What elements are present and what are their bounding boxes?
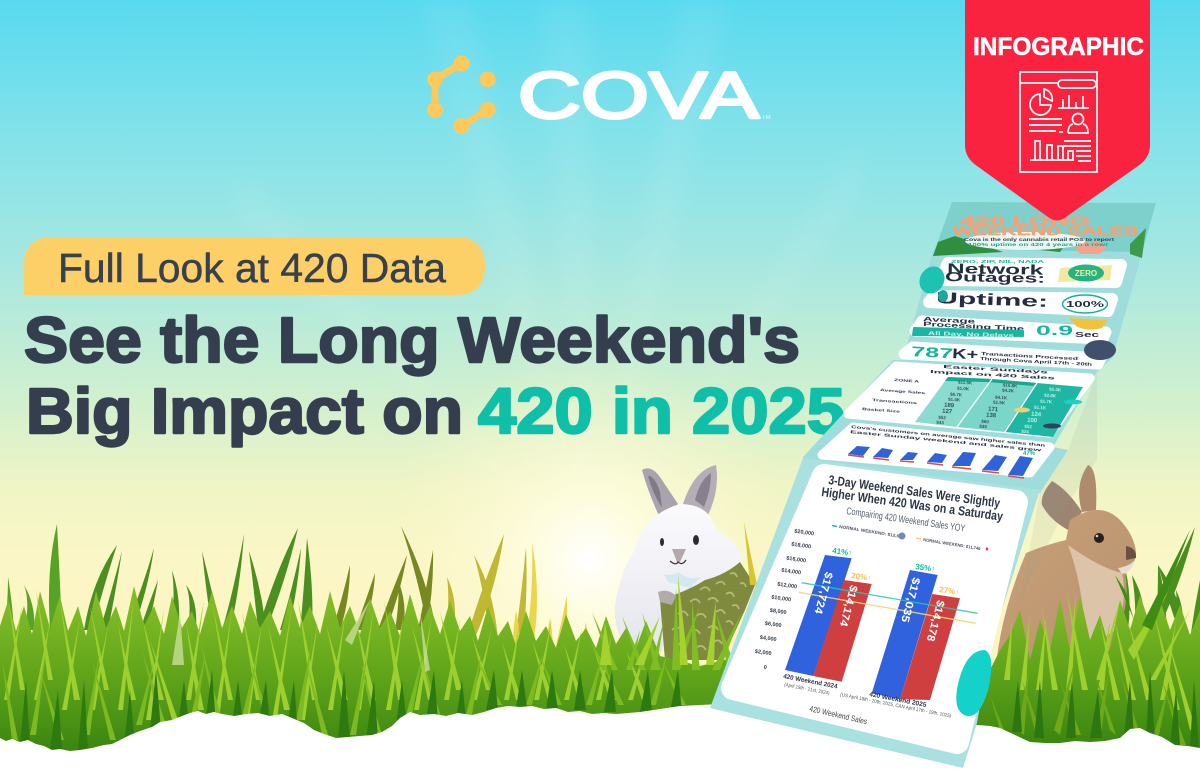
table values: $52 — [938, 415, 947, 420]
headline: See the Long Weekend's — [24, 304, 800, 376]
table values: $1.5K — [993, 400, 1006, 405]
table values: 138 — [986, 413, 997, 419]
panel: comparison table: $52 — [1024, 424, 1033, 429]
panel: comparison table: $5.4K — [1049, 387, 1062, 392]
rabbit ears — [1042, 465, 1096, 530]
panel: average processing time: Processing Time — [923, 321, 1025, 333]
bar values: $14,178 — [924, 599, 946, 643]
y axis labels: $16,000 — [786, 556, 806, 564]
table columns — [915, 377, 1083, 437]
infographic ribbon badge: INFOGRAPHIC — [973, 33, 1144, 61]
torn paper bottom edge — [0, 704, 1200, 775]
panel: weekly bar chart: 47% — [1023, 451, 1036, 457]
sheet header: Cova is the only cannabis retail POS to report — [964, 237, 1115, 242]
reference lines — [802, 583, 978, 613]
panel: weekly bar chart: Easter Sunday weekend and sales grew — [850, 429, 1044, 453]
sheet header: 420 LONG — [960, 214, 1090, 228]
headline: Big Impact on — [26, 375, 463, 447]
panel: uptime — [929, 290, 1112, 313]
table values: $1.4K — [948, 397, 961, 402]
icon: zero badge — [1058, 264, 1112, 282]
white rabbit — [615, 465, 755, 660]
panel: comparison table — [848, 364, 1090, 437]
y axis labels: $12,000 — [777, 582, 797, 590]
panel: average processing time: Sec — [1075, 332, 1099, 339]
sheet header: WEEKEND SALES — [953, 224, 1138, 238]
mini bars — [848, 446, 1033, 476]
icon: report document — [1020, 72, 1097, 172]
panel: comparison table: 124 — [1031, 412, 1042, 418]
table values: 171 — [988, 407, 999, 413]
sheet lower background — [710, 458, 1040, 768]
bar values — [811, 570, 946, 643]
chart title — [821, 472, 1005, 535]
y axis labels: $4,000 — [759, 635, 777, 643]
panel: network outages: Network — [947, 260, 1044, 278]
panel: transactions: K+ — [952, 345, 979, 362]
panel: transactions — [904, 343, 1101, 367]
panel: average processing time: All Day, No Delays — [928, 331, 1014, 339]
table row labels: ZONE A — [894, 378, 920, 384]
bar percent labels: 27%↑ — [939, 585, 960, 597]
table values: 127 — [942, 409, 953, 415]
icon: 100% ring: 100% — [1066, 300, 1104, 309]
table values: $4.2K — [1002, 388, 1015, 393]
icon: 100% ring — [1062, 295, 1108, 313]
x axis labels — [783, 673, 952, 726]
table values: $6.7K — [950, 392, 963, 397]
panel: network outages — [941, 259, 1121, 286]
logo — [427, 56, 771, 134]
sheet shadow on wall — [1020, 373, 1097, 600]
table values: $4.1K — [995, 395, 1008, 400]
table row labels: Basket Size — [862, 407, 900, 414]
sheet header: 100% uptime on 420 4 years in a row! — [968, 242, 1109, 247]
grass: foreground over white rabbit — [590, 522, 757, 670]
x axis labels: 420 Weekend 2025 — [869, 691, 927, 709]
y axis labels: $14,000 — [781, 568, 801, 576]
y axis labels: 0 — [763, 665, 767, 671]
x axis labels: 420 Weekend Sales — [809, 704, 868, 726]
panel: comparison table: 100 — [1027, 418, 1038, 424]
bar percent labels — [832, 546, 960, 597]
grass: back blades right — [1120, 527, 1200, 640]
grass: main mass left — [0, 586, 740, 761]
panel: average processing time: Average — [923, 316, 976, 326]
chart title: Higher When 420 Was on a Saturday — [821, 484, 1005, 524]
chart legend: NORMAL WEEKEND: $12,602 — [839, 524, 905, 539]
panel: comparison table: $24 — [1021, 429, 1030, 434]
headline: 420 in 2025 — [478, 375, 845, 447]
y axis labels: $20,000 — [794, 529, 814, 537]
chart title: 3-Day Weekend Sales Were Slightly — [828, 472, 1002, 511]
panel: uptime: Uptime: — [936, 290, 1048, 311]
icon: yellow ribbon — [1069, 318, 1108, 330]
brown rabbit — [995, 465, 1136, 680]
table values: $15.8K — [1003, 383, 1018, 389]
y axis labels: $6,000 — [764, 621, 782, 629]
y axis labels: $18,000 — [791, 542, 811, 550]
table values: 189 — [944, 403, 955, 409]
bar percent labels: 35%↑ — [915, 562, 936, 574]
bar percent labels: 20%↑ — [851, 571, 872, 583]
y axis labels — [754, 529, 814, 671]
panel: comparison table: Impact on 420 Sales — [930, 369, 1056, 381]
panel: transactions: 787 — [911, 343, 954, 361]
sheet upper background — [803, 202, 1156, 493]
panel: transactions: Through Cova April 17th - 20th — [980, 356, 1092, 367]
infographic ribbon badge — [965, 0, 1150, 220]
decorative eggs — [915, 262, 1116, 716]
table values: $60 — [981, 419, 990, 424]
table row labels — [862, 378, 925, 414]
panel: average processing time: 0.9 — [1036, 322, 1073, 338]
pill label: Full Look at 420 Data — [58, 245, 446, 291]
bar values: $17,035 — [898, 576, 922, 624]
panel: weekly bar chart: Cova's customers on average saw higher sales than — [851, 424, 1047, 448]
bars — [785, 555, 960, 700]
panel: comparison table: $2.8K — [1044, 393, 1057, 398]
logo wordmark: COVA — [518, 58, 759, 132]
logo mark: connected dots — [427, 56, 496, 134]
table values: $43 — [936, 420, 945, 425]
folded infographic sheet — [710, 202, 1156, 768]
rabbit ears — [642, 465, 717, 518]
table values — [936, 380, 1018, 429]
sheet header — [933, 202, 1156, 258]
bar values: $17,724 — [811, 570, 834, 616]
mini bar baselines — [848, 455, 1024, 478]
y axis labels: $2,000 — [754, 649, 772, 657]
table row labels: Transactions — [872, 398, 917, 405]
chart legend — [832, 524, 989, 553]
panel: network outages: Outages: — [945, 269, 1045, 286]
icon: zero badge: ZERO — [1075, 269, 1097, 278]
panel: comparison table: $1.7K — [1040, 399, 1053, 404]
panel: weekly bar chart — [822, 424, 1050, 478]
grass: main mass right — [960, 530, 1200, 760]
panel: 3-day weekend sales chart — [733, 472, 1016, 742]
logo: TM — [762, 115, 771, 121]
table values: $1.0K — [957, 386, 970, 391]
chart title: Compairing 420 Weekend Sales YOY — [846, 506, 966, 535]
x axis labels: (April 19th - 21st, 2024) — [784, 682, 830, 697]
panel: transactions: Transactions Processed — [981, 351, 1079, 361]
bar values: $14,174 — [837, 584, 859, 628]
panel: comparison table: $1.1K — [1034, 405, 1047, 410]
table row labels: Average Sales — [880, 388, 925, 395]
panel: network outages: ZERO, ZIP, NIL, NADA — [951, 259, 1045, 264]
y axis labels: $10,000 — [771, 595, 791, 603]
cannabis bud — [660, 562, 755, 660]
panel: average processing time — [913, 316, 1108, 339]
bar percent labels: 41%↑ — [832, 546, 853, 558]
grass: back blades left — [5, 524, 588, 690]
headline — [24, 304, 845, 447]
panel: comparison table: Easter Sundays — [943, 364, 1050, 375]
table values: $11.5K — [958, 380, 973, 386]
y axis labels: $8,000 — [769, 608, 787, 616]
x axis labels: (US April 18th - 20th, 2025, CAN April 17th - 19th, 2025) — [840, 692, 952, 720]
chart legend: NORMAL WEEKEND: $11,746 — [923, 537, 981, 551]
pill label — [24, 237, 485, 295]
chart legend: ♦ — [985, 546, 989, 553]
x axis labels: 420 Weekend 2024 — [783, 673, 838, 691]
table values: $39 — [979, 424, 988, 429]
